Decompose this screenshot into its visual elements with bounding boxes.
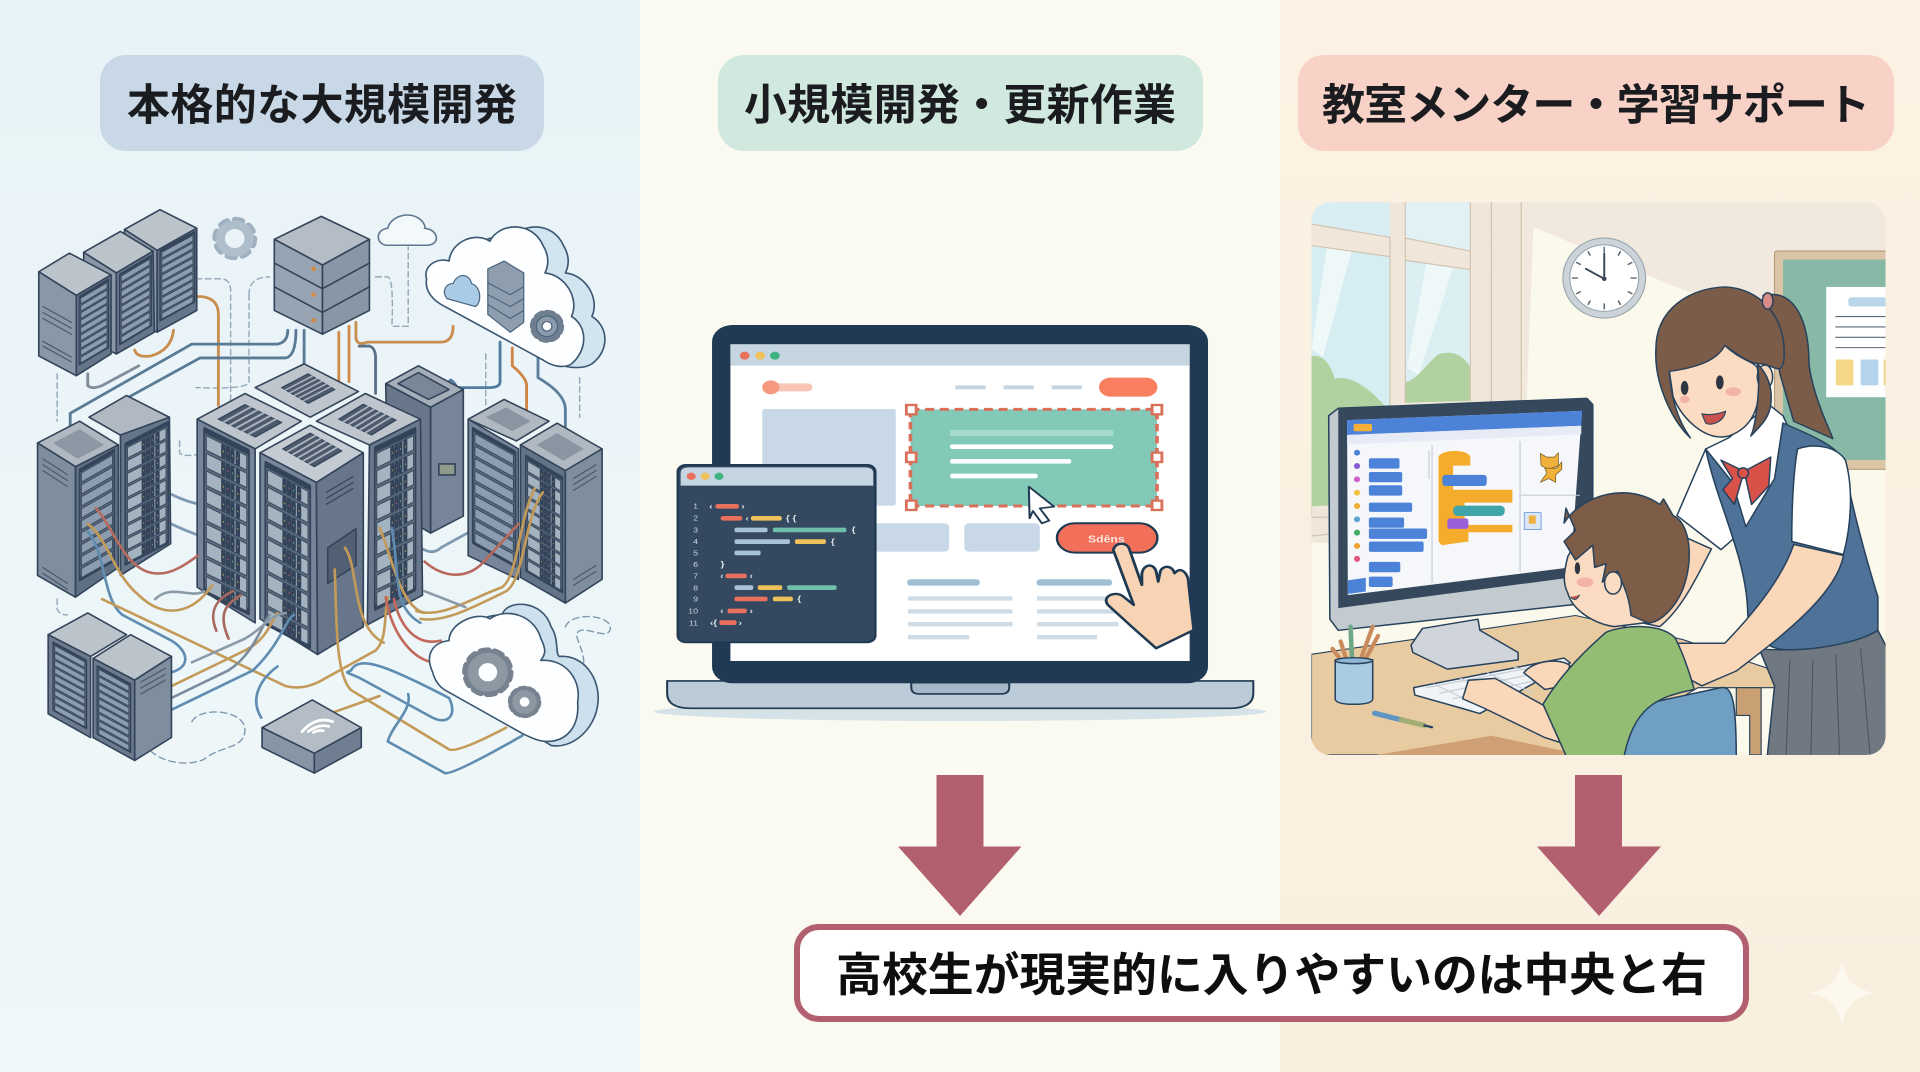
left rack pair — [38, 395, 171, 597]
code brackets: ‹ — [720, 606, 723, 615]
website image placeholder — [762, 409, 896, 506]
boy face — [1564, 546, 1646, 628]
green shirt — [1543, 627, 1694, 760]
girl face details — [1680, 375, 1741, 424]
watermark sparkle — [1809, 961, 1875, 1026]
network stack — [274, 216, 369, 334]
code brackets: › — [741, 502, 745, 511]
chair — [1623, 688, 1736, 760]
bottom left servers — [48, 613, 171, 760]
skirt — [1759, 630, 1891, 760]
boy face details — [1571, 562, 1594, 599]
code tokens — [715, 504, 846, 625]
trees outside — [1311, 356, 1390, 506]
code brackets: { — [797, 594, 802, 603]
computer monitor — [1329, 398, 1593, 669]
background dashed connectors — [57, 247, 580, 615]
pointing hand — [1106, 544, 1194, 648]
heading: large-scale development — [100, 55, 544, 151]
heading: small-scale development: 小規模開発・更新作業 — [744, 82, 1176, 130]
code brackets: } — [721, 560, 725, 569]
right sleeve — [1792, 446, 1850, 554]
website nav button — [1099, 378, 1157, 397]
boy right hand — [1524, 661, 1570, 690]
line numbers: 5 — [693, 549, 699, 557]
back cables — [70, 297, 565, 552]
panel: left background — [0, 0, 640, 1072]
line numbers: 1 — [693, 502, 699, 510]
code brackets: › — [739, 618, 742, 627]
website nav — [955, 385, 1082, 389]
dashed cloud outlines — [151, 617, 610, 763]
heading: large-scale development: 本格的な大規模開発 — [127, 82, 517, 130]
line numbers: 2 — [693, 514, 699, 522]
line numbers — [688, 502, 699, 627]
pencil cup — [1333, 627, 1378, 704]
boy arm — [1463, 678, 1568, 745]
line numbers: 4 — [693, 538, 699, 546]
navy vest — [1706, 423, 1878, 650]
placeholder cards — [870, 523, 1040, 552]
right arm — [1667, 544, 1843, 686]
line numbers: 8 — [693, 584, 699, 592]
monitor stand — [1411, 619, 1518, 669]
central rack cluster — [197, 364, 463, 654]
red button — [1057, 523, 1157, 553]
small cloud — [378, 215, 436, 245]
gear icon — [216, 220, 254, 257]
top left servers — [39, 210, 197, 376]
desk — [1311, 616, 1792, 755]
red button: Sdêns — [1088, 534, 1125, 545]
pen — [1375, 713, 1432, 727]
illustration: data center servers and cloud — [38, 210, 610, 773]
line numbers: 9 — [693, 595, 699, 603]
cloud gears — [466, 651, 538, 715]
illustration: classroom mentoring — [1311, 202, 1894, 760]
boy hair — [1564, 493, 1689, 623]
keyboard — [1414, 658, 1570, 714]
hair — [1656, 287, 1784, 438]
ponytail — [1763, 294, 1833, 439]
code brackets: › — [750, 606, 753, 615]
selected teal section — [906, 405, 1162, 510]
code editor window — [678, 465, 875, 642]
conclusion callout: 高校生が現実的に入りやすいのは中央と右 — [836, 949, 1707, 1001]
heading: classroom mentor: 教室メンター・学習サポート — [1322, 82, 1870, 130]
code brackets: ‹ — [709, 502, 712, 511]
scratch ui — [1347, 411, 1582, 435]
heading: classroom mentor — [1298, 55, 1894, 151]
router with wifi — [262, 700, 361, 773]
conclusion callout — [797, 927, 1746, 1019]
website text lines — [907, 579, 1119, 639]
line numbers: 11 — [689, 619, 699, 627]
window — [1311, 202, 1522, 543]
laptop base — [667, 681, 1253, 708]
girl left arm — [1643, 538, 1711, 627]
white shirt — [1677, 405, 1798, 550]
front cables — [88, 488, 543, 773]
code brackets: { { — [786, 514, 797, 523]
laptop shadow — [654, 702, 1266, 721]
scrunchie — [1762, 293, 1773, 309]
bottom cloud — [429, 604, 598, 746]
website logo — [762, 380, 812, 394]
panel: right background — [1280, 0, 1920, 1072]
code brackets: { — [831, 537, 835, 546]
line numbers: 7 — [693, 572, 699, 580]
trackpad notch — [911, 683, 1009, 694]
line numbers: 10 — [688, 607, 699, 615]
line numbers: 3 — [693, 526, 699, 534]
bulletin board — [1775, 251, 1894, 469]
heading: small-scale development — [718, 55, 1203, 151]
mouse cursor — [1029, 487, 1054, 523]
boy ear — [1605, 572, 1621, 594]
red bow — [1721, 457, 1771, 504]
upper cloud — [426, 227, 605, 368]
arrow: right to conclusion — [1537, 775, 1661, 916]
panel: middle background — [640, 0, 1280, 1072]
right rack pair — [468, 399, 602, 603]
sunlit wall — [1311, 227, 1886, 755]
arrow: middle to conclusion — [898, 775, 1022, 916]
cloud contents — [444, 261, 560, 339]
boy figure — [1463, 493, 1694, 760]
code brackets: ‹ — [746, 514, 749, 523]
line numbers: 6 — [693, 561, 699, 569]
laptop body — [712, 325, 1208, 683]
girl figure — [1656, 287, 1891, 760]
code brackets — [709, 502, 856, 627]
wall clock — [1563, 238, 1646, 318]
code brackets: ‹ — [750, 571, 753, 580]
screen — [730, 344, 1190, 661]
ear — [1757, 365, 1773, 389]
code brackets: { — [852, 525, 856, 534]
illustration: laptop with website and code editor — [654, 325, 1266, 721]
wall — [1522, 202, 1886, 400]
scratch cat — [1540, 453, 1562, 482]
code brackets: ‹{ — [710, 618, 718, 627]
code brackets: ‹ — [720, 571, 723, 580]
face — [1669, 345, 1759, 437]
